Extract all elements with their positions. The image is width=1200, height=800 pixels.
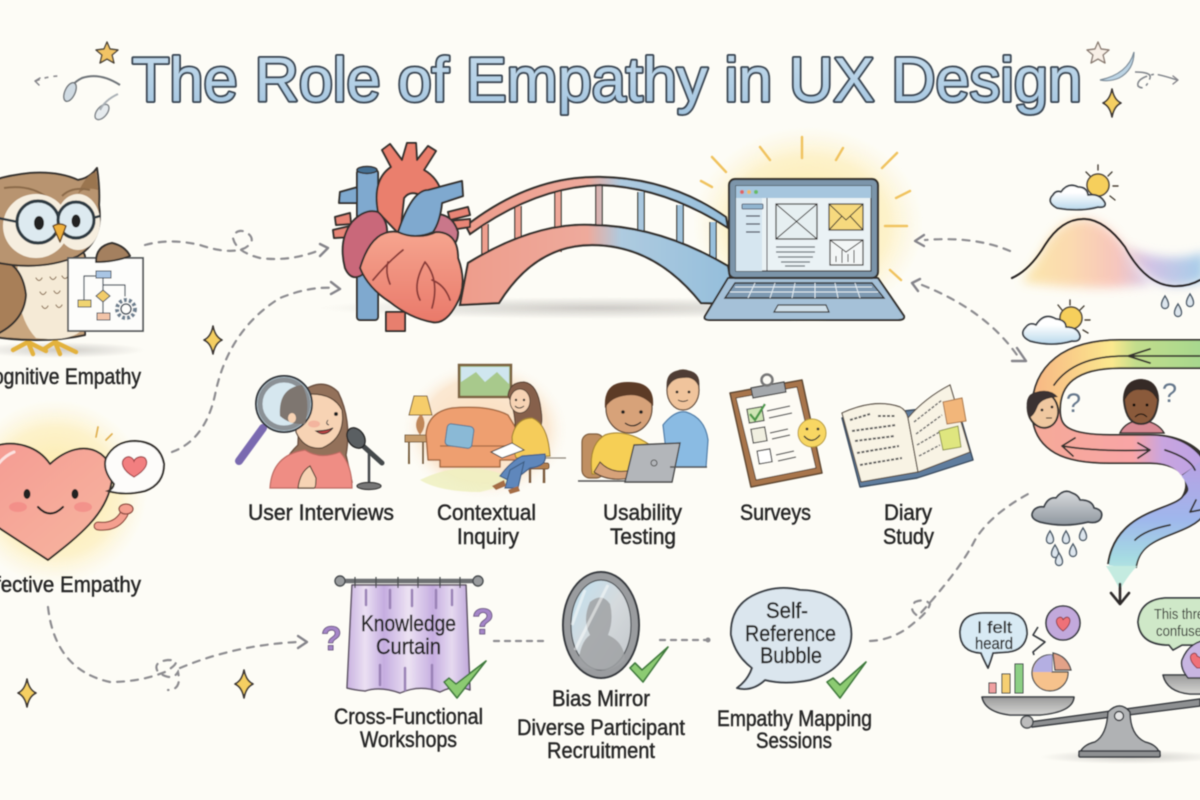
icon: scale beam and base — [1021, 699, 1200, 757]
icon: smiley face — [798, 419, 826, 447]
icon: cloud and sun middle — [1023, 300, 1090, 344]
text: knowledge curtain — [361, 611, 456, 659]
label: contextual inquiry: Inquiry — [457, 524, 519, 549]
icon: clipboard — [730, 374, 822, 487]
icon: speech bubble with heart — [105, 441, 164, 494]
text: purple question mark right: ? — [472, 601, 494, 642]
icon: sparkle bottom — [235, 670, 253, 698]
label: usability testing: Usability — [603, 500, 682, 525]
icon: bridge — [460, 177, 735, 305]
icon: rainbow journey river — [1046, 349, 1200, 590]
icon: left scale pan — [982, 697, 1074, 715]
label: contextual inquiry: Contextual — [437, 500, 536, 525]
panel: balance scale — [960, 598, 1200, 764]
icon: pie chart — [1032, 653, 1071, 691]
icon: child with tablet — [578, 382, 707, 482]
text: purple question mark left: ? — [321, 620, 342, 658]
icon: purple heart drop — [1182, 640, 1200, 678]
panel: contextual inquiry — [401, 360, 569, 549]
icon: heart arm — [98, 504, 133, 526]
text: knowledge curtain: Curtain — [376, 634, 441, 659]
arrow: bubble to journey — [870, 494, 1028, 641]
icon: worried person left — [1024, 389, 1062, 431]
label: diary study — [883, 500, 934, 549]
label: usability testing: Testing — [610, 524, 676, 549]
icon: I felt heard bubble: I felt — [977, 618, 1012, 637]
icon: woman writing — [491, 382, 550, 494]
icon: scale shadow — [1040, 750, 1200, 764]
icon: light rays — [701, 137, 910, 280]
label: diary study: Study — [883, 524, 934, 549]
icon: oval mirror — [563, 572, 639, 678]
text: self-reference bubble — [745, 598, 836, 668]
arrow: owl to heart bridge — [145, 231, 328, 259]
icon: ground shadow — [320, 297, 880, 319]
panel: usability testing — [578, 370, 708, 549]
panel: self-reference bubble — [717, 588, 872, 753]
label: empathy mapping sessions — [717, 706, 872, 753]
label: diverse participant recruitment — [517, 715, 685, 763]
panel: heart bridge laptop — [320, 127, 923, 331]
icon: sparkle bottom left — [18, 679, 36, 707]
icon: cloud and sun top — [1050, 165, 1118, 210]
icon: magnifying glass — [239, 376, 312, 461]
label: cross-functional workshops — [334, 704, 483, 752]
icon: confusing bubble — [1138, 598, 1200, 650]
panel: bias mirror — [517, 572, 685, 763]
panel: cognitive empathy owl — [0, 168, 145, 389]
icon: green check — [630, 647, 668, 682]
icon: title decoration right — [1087, 42, 1178, 117]
text: self-reference bubble: Reference — [745, 621, 836, 646]
text: question mark right: ? — [1162, 378, 1177, 408]
arrow: affective to knowledge curtain — [48, 607, 307, 690]
arrow: heart to bridge — [172, 282, 340, 452]
icon: emotional hill — [1012, 219, 1200, 316]
text: knowledge curtain: Knowledge — [361, 611, 456, 636]
icon: anatomical heart — [333, 143, 470, 331]
title: The Role of Empathy in UX Design — [132, 46, 1082, 115]
panel: knowledge curtain — [321, 576, 494, 752]
panel: emotional journey — [1012, 165, 1200, 604]
icon: living room scene — [401, 360, 569, 500]
icon: sad person — [1120, 379, 1164, 433]
icon: microphone — [343, 424, 382, 490]
arrow: river down to scale — [1111, 584, 1129, 604]
icon: glow behind laptop — [693, 127, 923, 323]
text: question mark: ? — [1066, 388, 1081, 418]
icon: glow behind heart — [0, 400, 147, 584]
icon: title decoration left — [35, 42, 120, 122]
icon: owl — [0, 168, 145, 358]
label: diverse participant recruitment: Diverse Participant — [517, 715, 685, 740]
icon: open diary — [842, 385, 973, 487]
label: surveys: Surveys — [740, 500, 811, 525]
icon: sparkle — [204, 326, 222, 354]
label: cross-functional workshops: Workshops — [360, 727, 457, 752]
panel: bias barriers row — [321, 572, 872, 763]
label: empathy mapping sessions: Sessions — [756, 728, 832, 753]
panel: affective empathy heart — [0, 400, 164, 597]
icon: heart circle — [1046, 606, 1080, 640]
text: self-reference bubble: Bubble — [760, 643, 822, 668]
icon: rain cloud — [1032, 491, 1102, 566]
label: empathy mapping sessions: Empathy Mapping — [717, 706, 872, 731]
label: bias mirror: Bias Mirror — [552, 686, 650, 711]
icon: green check — [444, 661, 486, 698]
label: user interviews: User Interviews — [248, 500, 394, 525]
label: diverse participant recruitment: Recruitment — [547, 738, 655, 763]
icon: laptop — [705, 179, 904, 320]
icon: smiling heart character — [0, 427, 112, 560]
icon: owl wing hand — [96, 243, 130, 262]
panel: diary study — [842, 385, 973, 549]
icon: adult observer — [663, 370, 708, 467]
arrow: mirror to bubble — [660, 638, 710, 642]
icon: I felt heard bubble: heard — [975, 634, 1013, 653]
icon: bar chart — [989, 664, 1023, 693]
arrow: emotional hill to laptop — [915, 235, 1010, 251]
panel: research methods row — [239, 360, 973, 549]
icon: flowchart paper — [68, 258, 143, 331]
icon: curtain — [335, 576, 483, 693]
label: diary study: Diary — [884, 500, 932, 525]
icon: I felt heard bubble — [960, 613, 1027, 668]
text: self-reference bubble: Self- — [766, 598, 808, 623]
panel: surveys — [730, 374, 826, 525]
panel: user interviews — [239, 376, 394, 525]
icon: right scale pan — [1163, 675, 1200, 694]
arrow: curtain to mirror — [494, 640, 545, 642]
label: cross-functional workshops: Cross-Functional — [334, 704, 483, 729]
icon: interview girl — [270, 384, 352, 488]
arrow: journey to laptop both ways — [912, 279, 1026, 361]
icon: cloud speech bubble — [731, 588, 851, 689]
label: usability testing — [603, 500, 682, 549]
icon: green check — [827, 662, 866, 698]
label: contextual inquiry — [437, 500, 536, 549]
icon: zigzag connector — [1033, 627, 1045, 655]
